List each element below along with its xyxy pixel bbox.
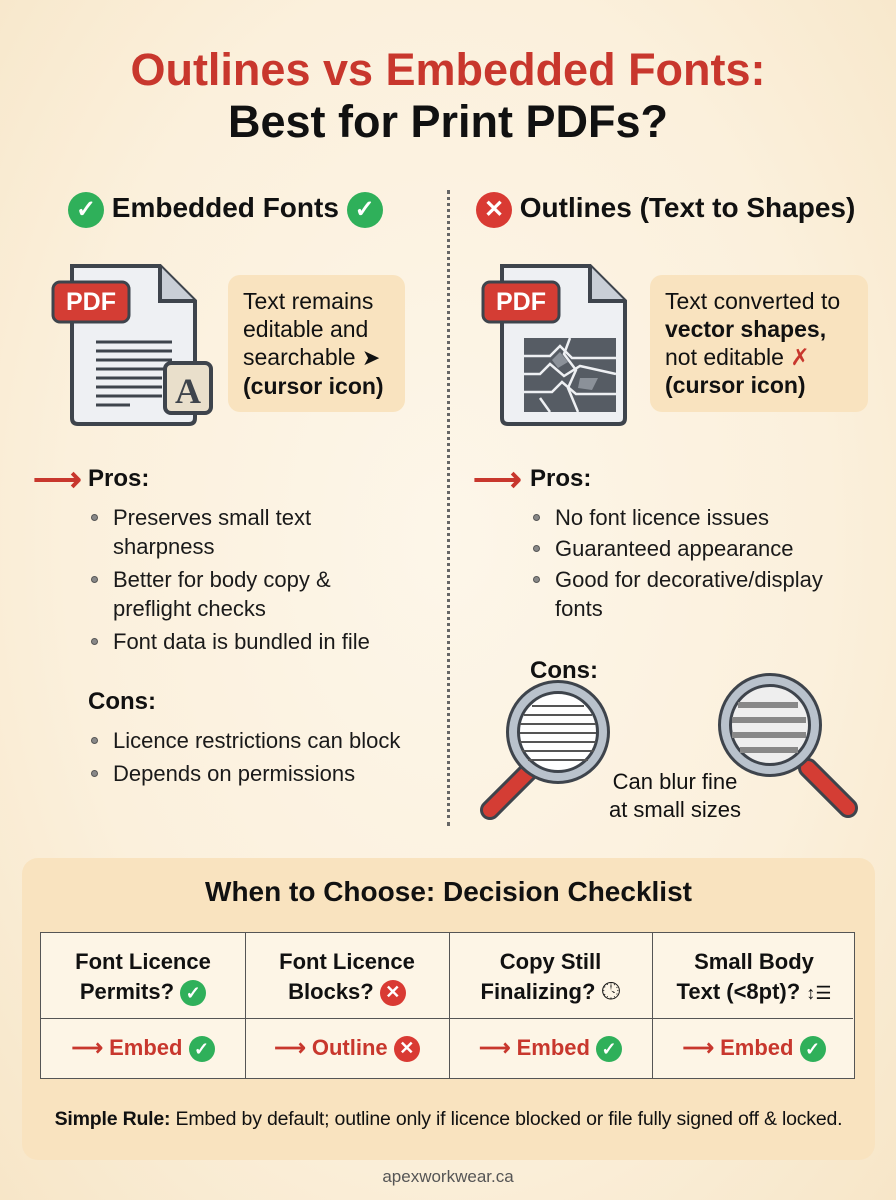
left pros: Font data is bundled in file [113,629,370,654]
table: Copy Still [500,949,601,974]
table: ✕ [399,1038,414,1058]
callout: outlines: not editable ✗ [665,344,810,370]
title: Best for Print PDFs? [228,96,668,147]
left pros [33,461,370,654]
left cons: Cons: [88,688,156,715]
panel: decision checklist [22,858,875,1160]
right pros: Good for decorative/display fonts [555,567,823,621]
table: ✓ [186,983,201,1003]
table: ⟶ Embed [479,1035,590,1060]
icon: pdf outlines [482,264,627,426]
text: can blur: Can blur fine [613,769,737,794]
heading: outlines: ✕ [484,196,504,223]
left pros: Pros: [88,465,149,492]
right pros: Pros: [530,465,591,492]
text: can blur [609,769,741,822]
callout: outlines: (cursor icon) [665,372,806,398]
table: Small Body [694,949,814,974]
right cons heading: Cons: [530,657,598,684]
footer: apexworkwear.ca [382,1167,514,1186]
table: Finalizing? 🕓︎ [480,978,620,1005]
table: ✓ [805,1039,820,1059]
callout: outlines [650,275,868,412]
table: ⟶ Outline [274,1035,388,1060]
heading: embedded [68,192,383,228]
title [130,44,766,147]
table: Font Licence [75,949,211,974]
table: ✓ [194,1039,209,1059]
icon: pdf embedded [52,264,213,426]
table: ✕ [385,982,400,1002]
table [40,932,855,1079]
icon: pdf outlines: PDF [496,288,546,316]
right pros [473,461,823,621]
heading: embedded: ✓ [76,196,96,223]
callout: outlines: vector shapes, [665,316,826,342]
callout: embedded: (cursor icon) [243,373,384,399]
callout: embedded: Text remains editable and searchable ➤ [243,288,380,370]
table: Permits? [80,979,174,1004]
left cons: Licence restrictions can block [113,728,400,753]
icon: magnifiers [480,673,858,820]
table: Text (<8pt)? ↕☰ [677,979,831,1004]
icon: pdf embedded: PDF [66,288,116,316]
left cons [88,688,400,786]
callout: embedded [228,275,405,412]
heading: embedded: ✓ [355,196,375,223]
checklist heading: When to Choose: Decision Checklist [205,876,692,907]
right pros: No font licence issues [555,505,769,530]
table: ⟶ Embed [682,1035,793,1060]
table: Font Licence [279,949,415,974]
arrow: ⟶ [33,461,82,499]
text: can blur: at small sizes [609,797,741,822]
table: ⟶ Embed [71,1035,182,1060]
table: Blocks? [288,979,374,1004]
left pros: Better for body copy & preflight checks [113,567,331,621]
divider [447,190,450,826]
right pros: ⟶ [473,461,522,499]
callout: outlines: Text converted to [665,288,840,314]
title: Outlines vs Embedded Fonts: [130,44,766,95]
left cons: Depends on permissions [113,761,355,786]
table: ✓ [602,1039,617,1059]
heading: embedded: Embedded Fonts [112,192,339,223]
left pros: Preserves small text sharpness [113,505,311,559]
simple rule: Simple Rule: Embed by default; outline only if licence blocked or file fully signed off & locked. [55,1108,842,1130]
icon: pdf embedded: A [175,371,201,411]
heading: outlines: Outlines (Text to Shapes) [520,192,855,223]
right pros: Guaranteed appearance [555,536,794,561]
